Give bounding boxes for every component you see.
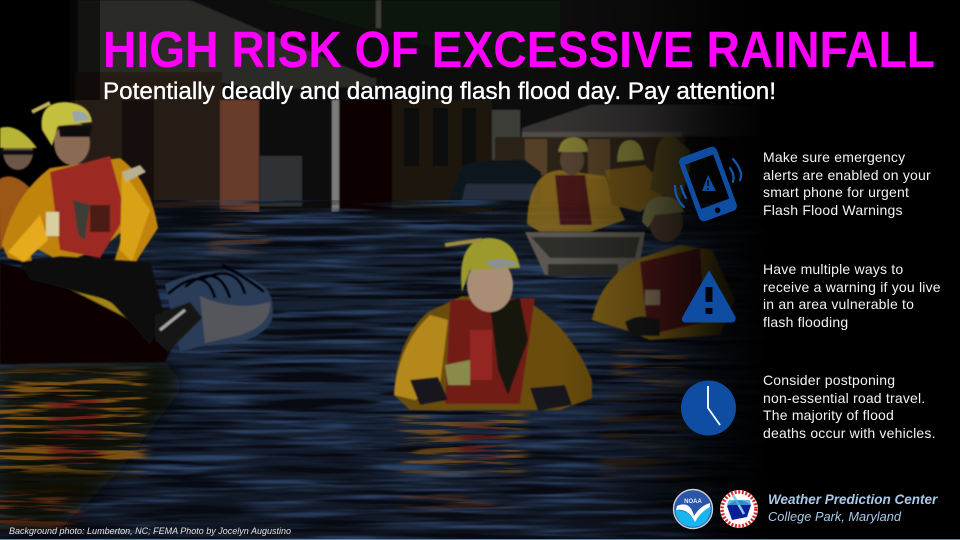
tip: emergency alerts: smart phone for urgent xyxy=(763,184,909,200)
organization name and location xyxy=(768,492,938,524)
rescuer: right wading xyxy=(592,196,735,340)
wave highlights xyxy=(0,212,960,540)
organization name and location: Weather Prediction Center xyxy=(768,492,937,507)
icon: warning triangle xyxy=(682,271,735,322)
icon: clock xyxy=(681,380,736,436)
organization name and location: College Park, Maryland xyxy=(768,509,901,524)
tip: multiple warning methods: flash flooding xyxy=(763,314,848,330)
tip: multiple warning methods: Have multiple ways to xyxy=(763,261,903,277)
tip: multiple warning methods: receive a warning if you live xyxy=(763,279,941,295)
tip: road travel: non-essential road travel. xyxy=(763,390,925,406)
tip: emergency alerts: Flash Flood Warnings xyxy=(763,202,903,218)
rescuer: left front in boat xyxy=(2,102,202,352)
logo: National Weather Service xyxy=(720,490,758,528)
tip: multiple warning methods: in an area vulnerable to xyxy=(763,296,914,312)
buildings xyxy=(0,0,960,225)
tip: road travel: The majority of flood xyxy=(763,407,894,423)
flood water xyxy=(0,212,960,540)
icon: smart phone with alert xyxy=(675,145,741,223)
tip: emergency alerts: alerts are enabled on your xyxy=(763,167,931,183)
tip: road travel: Consider postponing xyxy=(763,372,895,388)
photo credit: Background photo: Lumberton, NC; FEMA Photo by Jocelyn Augustino xyxy=(9,526,291,536)
tip: emergency alerts: Make sure emergency xyxy=(763,149,905,165)
subtitle: Potentially deadly and damaging flash flood day. Pay attention! xyxy=(103,78,776,105)
tip: multiple warning methods xyxy=(763,261,941,330)
tip: road travel: deaths occur with vehicles. xyxy=(763,425,936,441)
rescuer: left rear xyxy=(0,127,37,250)
rescuers: rear boat xyxy=(527,135,690,232)
wave shadows xyxy=(0,212,960,540)
logo: NOAA xyxy=(674,490,712,528)
tip: road travel xyxy=(763,372,936,441)
logo: NOAA: NOAA xyxy=(684,499,702,505)
rescuer: center wading xyxy=(394,238,592,411)
dark area beneath the boat xyxy=(0,362,185,530)
warm reflections in water xyxy=(0,222,690,525)
tip: emergency alerts xyxy=(763,149,931,218)
boat at left xyxy=(0,262,273,364)
rear rescue boat xyxy=(525,232,645,276)
